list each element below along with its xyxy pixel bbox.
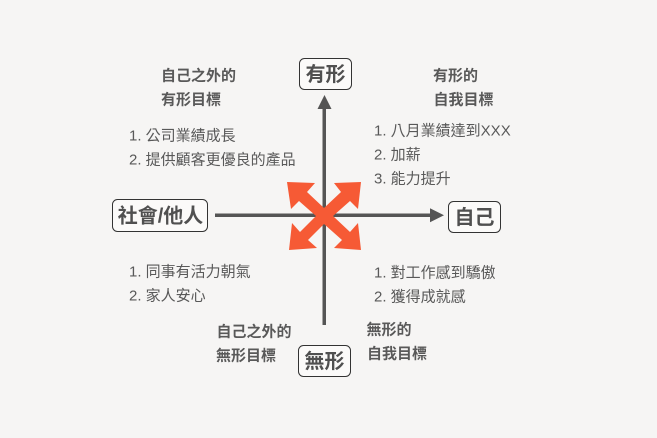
heading: bottom-left quadrant: 自己之外的 [216,322,292,340]
horizontal axis arrow [215,208,444,222]
heading: top-right quadrant [433,66,494,108]
label box: intangible [298,346,350,376]
list: bottom-right quadrant: 2. 獲得成就感 [374,288,466,306]
heading: top-left quadrant [161,66,236,108]
label box: tangible [300,58,352,90]
label box: society and others [112,200,208,232]
heading: top-left quadrant: 自己之外的 [161,66,236,84]
heading: top-right quadrant: 有形的 [433,66,478,84]
list: bottom-right quadrant: 1. 對工作感到驕傲 [374,264,496,282]
label box: self: 自己 [454,206,494,229]
list: top-right quadrant [374,122,511,188]
heading: top-right quadrant: 自我目標 [434,90,494,108]
heading: bottom-right quadrant [366,320,427,362]
list: top-right quadrant: 2. 加薪 [374,146,421,164]
label box: intangible: 無形 [304,349,344,373]
list: top-right quadrant: 1. 八月業績達到XXX [374,122,511,140]
list: top-left quadrant: 2. 提供顧客更優良的產品 [129,150,296,168]
list: bottom-right quadrant [374,264,496,306]
list: bottom-left quadrant: 1. 同事有活力朝氣 [129,264,251,280]
list: top-left quadrant: 1. 公司業績成長 [129,128,236,144]
heading: bottom-left quadrant [216,322,292,364]
label box: tangible: 有形 [306,63,346,86]
list: bottom-left quadrant: 2. 家人安心 [129,288,206,304]
list: bottom-left quadrant [129,264,251,304]
heading: bottom-right quadrant: 無形的 [366,320,412,338]
heading: top-left quadrant: 有形目標 [161,90,221,108]
list: top-right quadrant: 3. 能力提升 [374,170,451,188]
heading: bottom-right quadrant: 自我目標 [367,344,427,362]
vertical axis arrow [318,95,332,325]
list: top-left quadrant [129,128,296,168]
label box: self [448,202,500,232]
label box: society and others: 社會/他人 [118,204,203,228]
icon: orange four-way arrows [287,182,361,250]
heading: bottom-left quadrant: 無形目標 [216,346,276,364]
